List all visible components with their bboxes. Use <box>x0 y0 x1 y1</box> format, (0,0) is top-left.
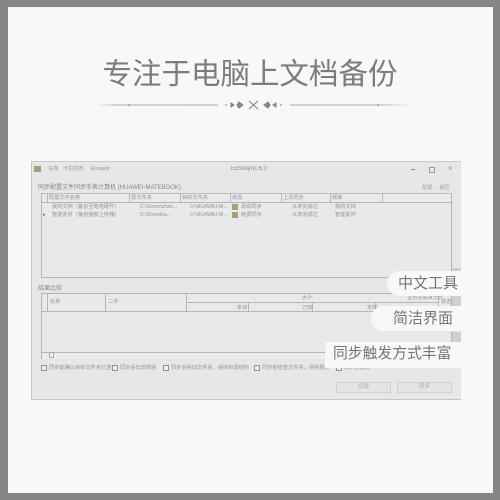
callout: rich sync triggers <box>325 342 462 368</box>
header labels: 目的文件夹 <box>182 195 208 201</box>
options checkboxes row <box>41 364 370 371</box>
row 1: C:\Users\zhan... <box>140 204 177 210</box>
header labels: 源文件夹 <box>131 195 152 201</box>
results table: 显示完成百分比 <box>407 295 443 301</box>
results table: 大小 <box>302 295 312 301</box>
row 2: D:\Downloa... <box>140 212 171 218</box>
row 2: 耗费同步 <box>241 212 262 218</box>
results table <box>41 293 452 359</box>
results table: 二字 <box>108 299 118 305</box>
window title bar: × <box>448 164 453 173</box>
header labels: 频率 <box>332 195 342 201</box>
sync button: 同步 <box>419 384 430 390</box>
options checkboxes row: 同步后移动文件夹，保持目录结构 <box>171 365 249 371</box>
callout: clean interface: 简洁界面 <box>393 310 453 327</box>
results table header <box>42 294 451 312</box>
window edge shading <box>452 268 461 342</box>
results table: 条目 <box>237 305 247 311</box>
window title bar <box>34 164 453 173</box>
table header <box>42 194 451 203</box>
results table: 未知 <box>367 305 377 311</box>
options checkboxes row: 同步前检查文件夹，保持更新 <box>262 365 329 371</box>
top links: 配置... 解压 <box>422 185 450 191</box>
options checkboxes row: 同步后比较校验 <box>120 365 156 371</box>
callout: clean interface <box>371 306 462 331</box>
callout: rich sync triggers: 同步触发方式丰富 <box>333 346 451 362</box>
row 1: 我的文档（备份至笔电硬件） <box>52 204 119 210</box>
results table: 名称 <box>50 299 60 305</box>
row 2: ▸ <box>43 212 46 218</box>
window title bar: 卡拉拉布 <box>63 166 84 172</box>
results table: 己知 <box>302 305 312 311</box>
row 2: 智能素材 <box>335 212 356 218</box>
row 2 <box>43 211 356 218</box>
callout: Chinese tool <box>387 271 462 296</box>
row 1: 源有同步 <box>241 204 262 210</box>
header labels: 状态 <box>232 195 242 201</box>
sync button <box>397 382 452 393</box>
header labels: 上次同步 <box>283 195 304 201</box>
row 1 <box>52 203 356 210</box>
title ornament divider <box>98 100 408 110</box>
window title bar: Ensayor <box>91 166 110 172</box>
header labels <box>49 194 342 201</box>
results table: 状态 <box>441 299 451 305</box>
row 2: 从未完成过 <box>292 212 318 218</box>
window title bar: Echosync 6.3 <box>231 166 267 172</box>
row 1: U:\HUAWEI-M... <box>190 204 228 210</box>
row 1: 从未完成过 <box>292 204 318 210</box>
options checkboxes row: 同步后删除 <box>344 365 370 371</box>
scrollbar <box>42 352 451 359</box>
window title bar: 马克 <box>48 166 58 172</box>
callout: Chinese tool: 中文工具 <box>398 275 458 292</box>
application window screenshot <box>31 161 461 400</box>
header labels: 配置文件名称 <box>49 195 80 201</box>
profile table <box>41 193 452 278</box>
profile list heading: 同步配置文件同步手表计算机 (HUAWEI-MATEBOOK) <box>38 185 181 191</box>
row 1: 我的文档 <box>335 204 356 210</box>
row 2: 智能素材（备份盘和上传器） <box>52 212 119 218</box>
row 2: U:\HUAWEI-M... <box>190 212 228 218</box>
compare button: 比较 <box>358 384 369 390</box>
options checkboxes row: 同步前确认目标文件夹已连接 <box>49 365 116 371</box>
results heading: 结果比较 <box>38 286 62 292</box>
title: 专注于电脑上文档备份 <box>102 58 398 91</box>
compare button <box>336 382 391 393</box>
